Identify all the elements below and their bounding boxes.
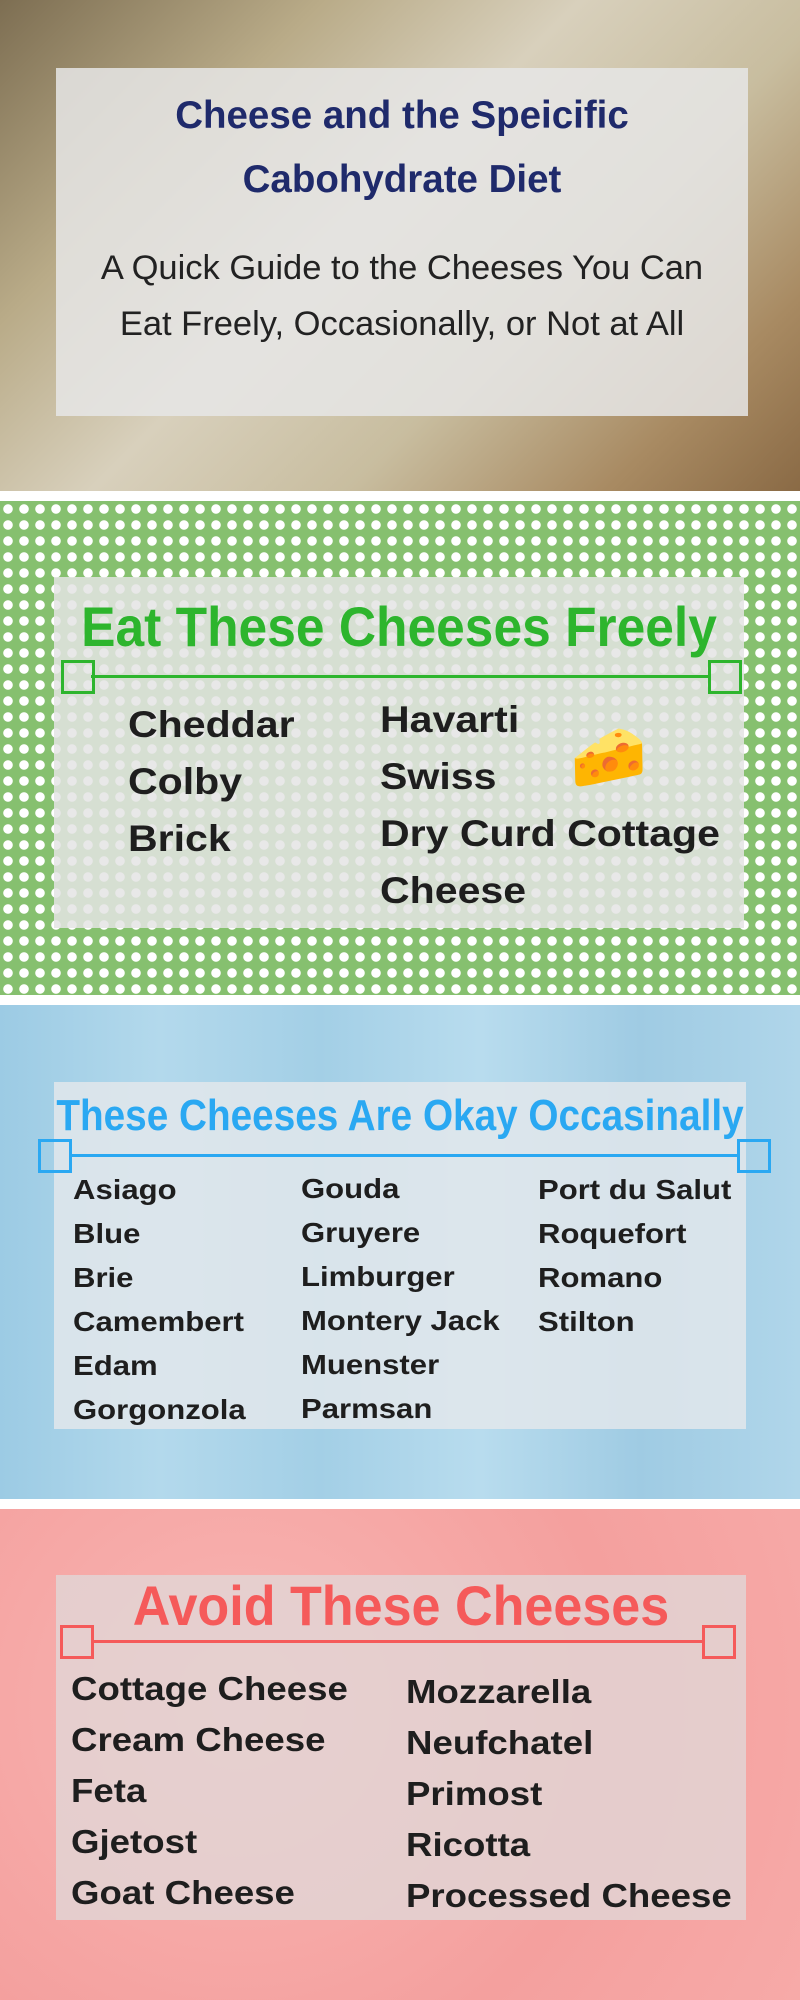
list left: Brick	[128, 818, 231, 859]
list col 2: Gouda	[301, 1173, 399, 1204]
panel: occasionally	[0, 1005, 800, 1499]
avoid box	[56, 1575, 746, 1920]
list right: Processed Cheese	[406, 1877, 732, 1914]
list col 1	[73, 1174, 246, 1425]
list col 1: Brie	[73, 1262, 133, 1293]
list right: Dry Curd Cottage	[380, 813, 720, 854]
list left	[128, 704, 295, 859]
list col 3: Stilton	[538, 1306, 635, 1337]
subtitle: A Quick Guide to the Cheeses You Can	[101, 249, 703, 287]
list col 2: Muenster	[301, 1349, 439, 1380]
list left: Cream Cheese	[71, 1721, 326, 1758]
list right: Swiss	[380, 756, 496, 797]
list right: Ricotta	[406, 1826, 530, 1863]
list col 3: Roquefort	[538, 1218, 686, 1249]
list col 1: Gorgonzola	[73, 1394, 246, 1425]
list col 3: Romano	[538, 1262, 662, 1293]
list col 2: Gruyere	[301, 1217, 420, 1248]
heading: Eat These Cheeses Freely	[81, 595, 717, 658]
panel: eat freely	[0, 501, 800, 995]
heading: Avoid These Cheeses	[133, 1574, 669, 1637]
list right: Mozzarella	[406, 1673, 591, 1710]
list right: Neufchatel	[406, 1724, 593, 1761]
list right: Cheese	[380, 870, 526, 911]
list col 1: Edam	[73, 1350, 158, 1381]
divider with squares	[38, 1139, 771, 1173]
title	[175, 94, 629, 201]
list left: Cheddar	[128, 704, 295, 745]
divider with squares	[61, 660, 742, 694]
list left	[71, 1670, 348, 1911]
list col 1: Camembert	[73, 1306, 244, 1337]
heading: These Cheeses Are Okay Occasinally	[56, 1091, 744, 1140]
list left: Colby	[128, 761, 242, 802]
list col 3: Port du Salut	[538, 1174, 731, 1205]
list col 1: Blue	[73, 1218, 140, 1249]
list right: Primost	[406, 1775, 542, 1812]
list right: Havarti	[380, 699, 519, 740]
header box	[56, 68, 748, 416]
subtitle	[101, 249, 703, 343]
subtitle: Eat Freely, Occasionally, or Not at All	[120, 305, 684, 343]
list col 2: Limburger	[301, 1261, 455, 1292]
list left: Feta	[71, 1772, 146, 1809]
list left: Gjetost	[71, 1823, 197, 1860]
freely box	[54, 577, 744, 928]
divider with squares	[60, 1625, 736, 1659]
list col 1: Asiago	[73, 1174, 177, 1205]
list col 2	[301, 1173, 500, 1424]
icon: cheese: 🧀	[570, 721, 647, 794]
list col 2: Parmsan	[301, 1393, 432, 1424]
occasional box	[54, 1082, 746, 1429]
list col 3	[538, 1174, 731, 1337]
title: Cabohydrate Diet	[243, 158, 561, 201]
panel: header	[0, 0, 800, 491]
list left: Cottage Cheese	[71, 1670, 348, 1707]
list left: Goat Cheese	[71, 1874, 295, 1911]
list col 2: Montery Jack	[301, 1305, 500, 1336]
list right	[380, 699, 720, 911]
panel: avoid	[0, 1509, 800, 2000]
title: Cheese and the Speicific	[175, 94, 629, 137]
list right	[406, 1673, 732, 1914]
